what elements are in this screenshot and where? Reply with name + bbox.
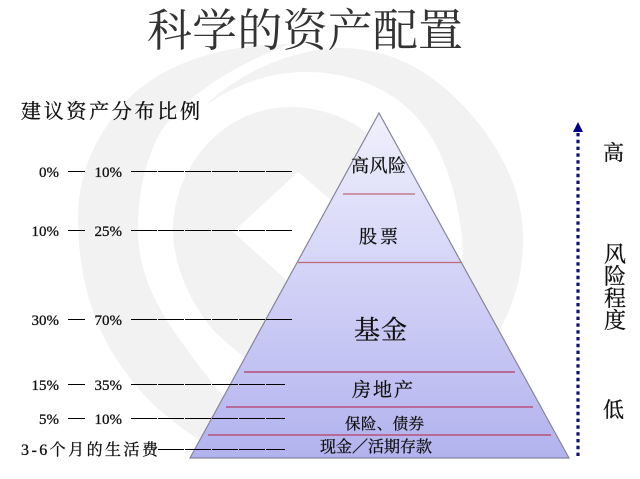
allocation row: 15% to 35% — [32, 378, 285, 394]
pyramid — [190, 113, 569, 458]
allocation row: 10% to 25%: 10% — [32, 224, 59, 240]
allocation row: 5% to 10%: 5% — [39, 412, 59, 428]
allocation row: 10% to 25%: 25% — [94, 224, 122, 240]
tier label: cash and deposits: 现金／活期存款 — [320, 438, 432, 456]
allocation row: 30% to 70%: 70% — [94, 313, 122, 329]
risk label: risk level — [604, 242, 626, 333]
allocation row: 5% to 10% — [39, 412, 285, 428]
tier divider lines — [208, 194, 551, 435]
allocation row: 0% to 10%: 10% — [94, 165, 122, 181]
allocation row: 0% to 10%: 0% — [39, 165, 59, 181]
allocation row: 30% to 70% — [32, 313, 293, 329]
allocation row: 15% to 35%: 15% — [32, 378, 59, 394]
risk label: risk level: 风 — [604, 242, 626, 267]
allocation row: 5% to 10%: 10% — [94, 412, 122, 428]
allocation row: 10% to 25% — [32, 224, 293, 240]
risk label: high: 高 — [603, 141, 624, 165]
title: 科学的资产配置 — [147, 6, 463, 56]
tier label: high risk: 高风险 — [351, 156, 406, 176]
allocation row: 3-6 months living expenses: 3-6个月的生活费 — [21, 441, 159, 459]
allocation row: 0% to 10% — [39, 165, 293, 181]
risk label: risk level: 程 — [604, 286, 626, 311]
tier label: stocks: 股票 — [359, 227, 398, 247]
tier label: real estate: 房地产 — [352, 379, 413, 401]
tier label: funds: 基金 — [354, 316, 407, 345]
tier label: insurance and bonds: 保险、债券 — [345, 415, 424, 433]
risk label: risk level: 险 — [604, 264, 626, 289]
risk label: low: 低 — [603, 398, 624, 422]
allocation row: 30% to 70%: 30% — [32, 313, 59, 329]
risk label: risk level: 度 — [604, 308, 626, 333]
background watermark: circular logo — [78, 44, 523, 450]
arrow: rising risk — [573, 122, 583, 456]
allocation row: 15% to 35%: 35% — [94, 378, 122, 394]
subtitle: suggested asset allocation: 建议资产分布比例 — [21, 100, 200, 123]
